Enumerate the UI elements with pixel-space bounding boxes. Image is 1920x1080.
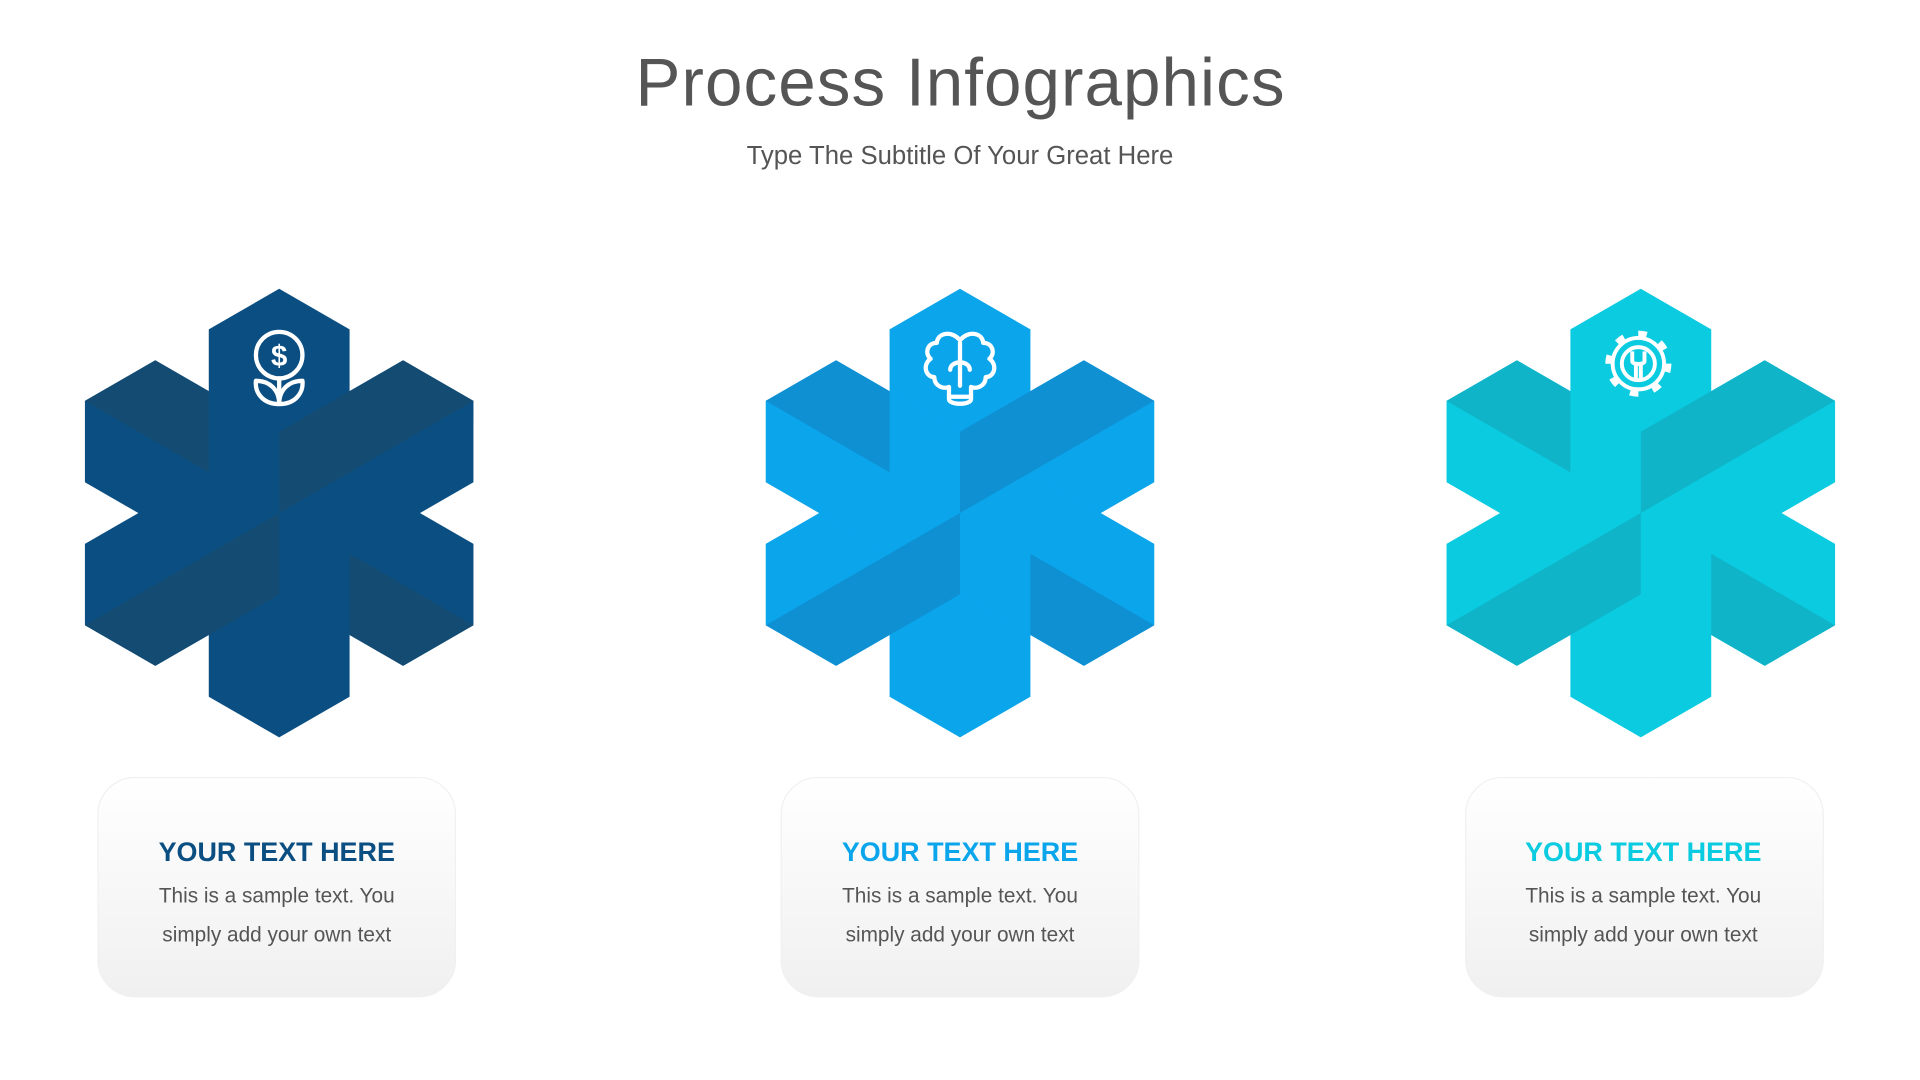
icon: money plant: $ xyxy=(271,340,287,373)
card 1 heading: YOUR TEXT HERE xyxy=(159,837,395,867)
shape 2: blue asterisk xyxy=(766,288,1154,738)
card 2 body: This is a sample text. You xyxy=(842,884,1078,907)
title: Process Infographics xyxy=(636,45,1284,120)
icon: brain xyxy=(926,334,994,404)
card 3 heading: YOUR TEXT HERE xyxy=(1525,837,1761,867)
card 2 xyxy=(781,778,1139,997)
shape 3: cyan asterisk xyxy=(1446,288,1836,738)
card 1 body: This is a sample text. You xyxy=(159,884,395,907)
card 2 body: simply add your own text xyxy=(846,924,1075,947)
icon: money plant xyxy=(256,332,303,404)
icon: gear with wrench xyxy=(1608,334,1668,394)
shape 1: dark blue asterisk xyxy=(84,288,474,738)
subtitle: Type The Subtitle Of Your Great Here xyxy=(747,142,1173,170)
card 3 xyxy=(1466,778,1823,997)
card 3 body: simply add your own text xyxy=(1529,924,1758,947)
card 2 heading: YOUR TEXT HERE xyxy=(842,837,1078,867)
card 3 body: This is a sample text. You xyxy=(1525,884,1761,907)
card 1 body: simply add your own text xyxy=(162,924,391,947)
card 1 xyxy=(98,778,456,997)
